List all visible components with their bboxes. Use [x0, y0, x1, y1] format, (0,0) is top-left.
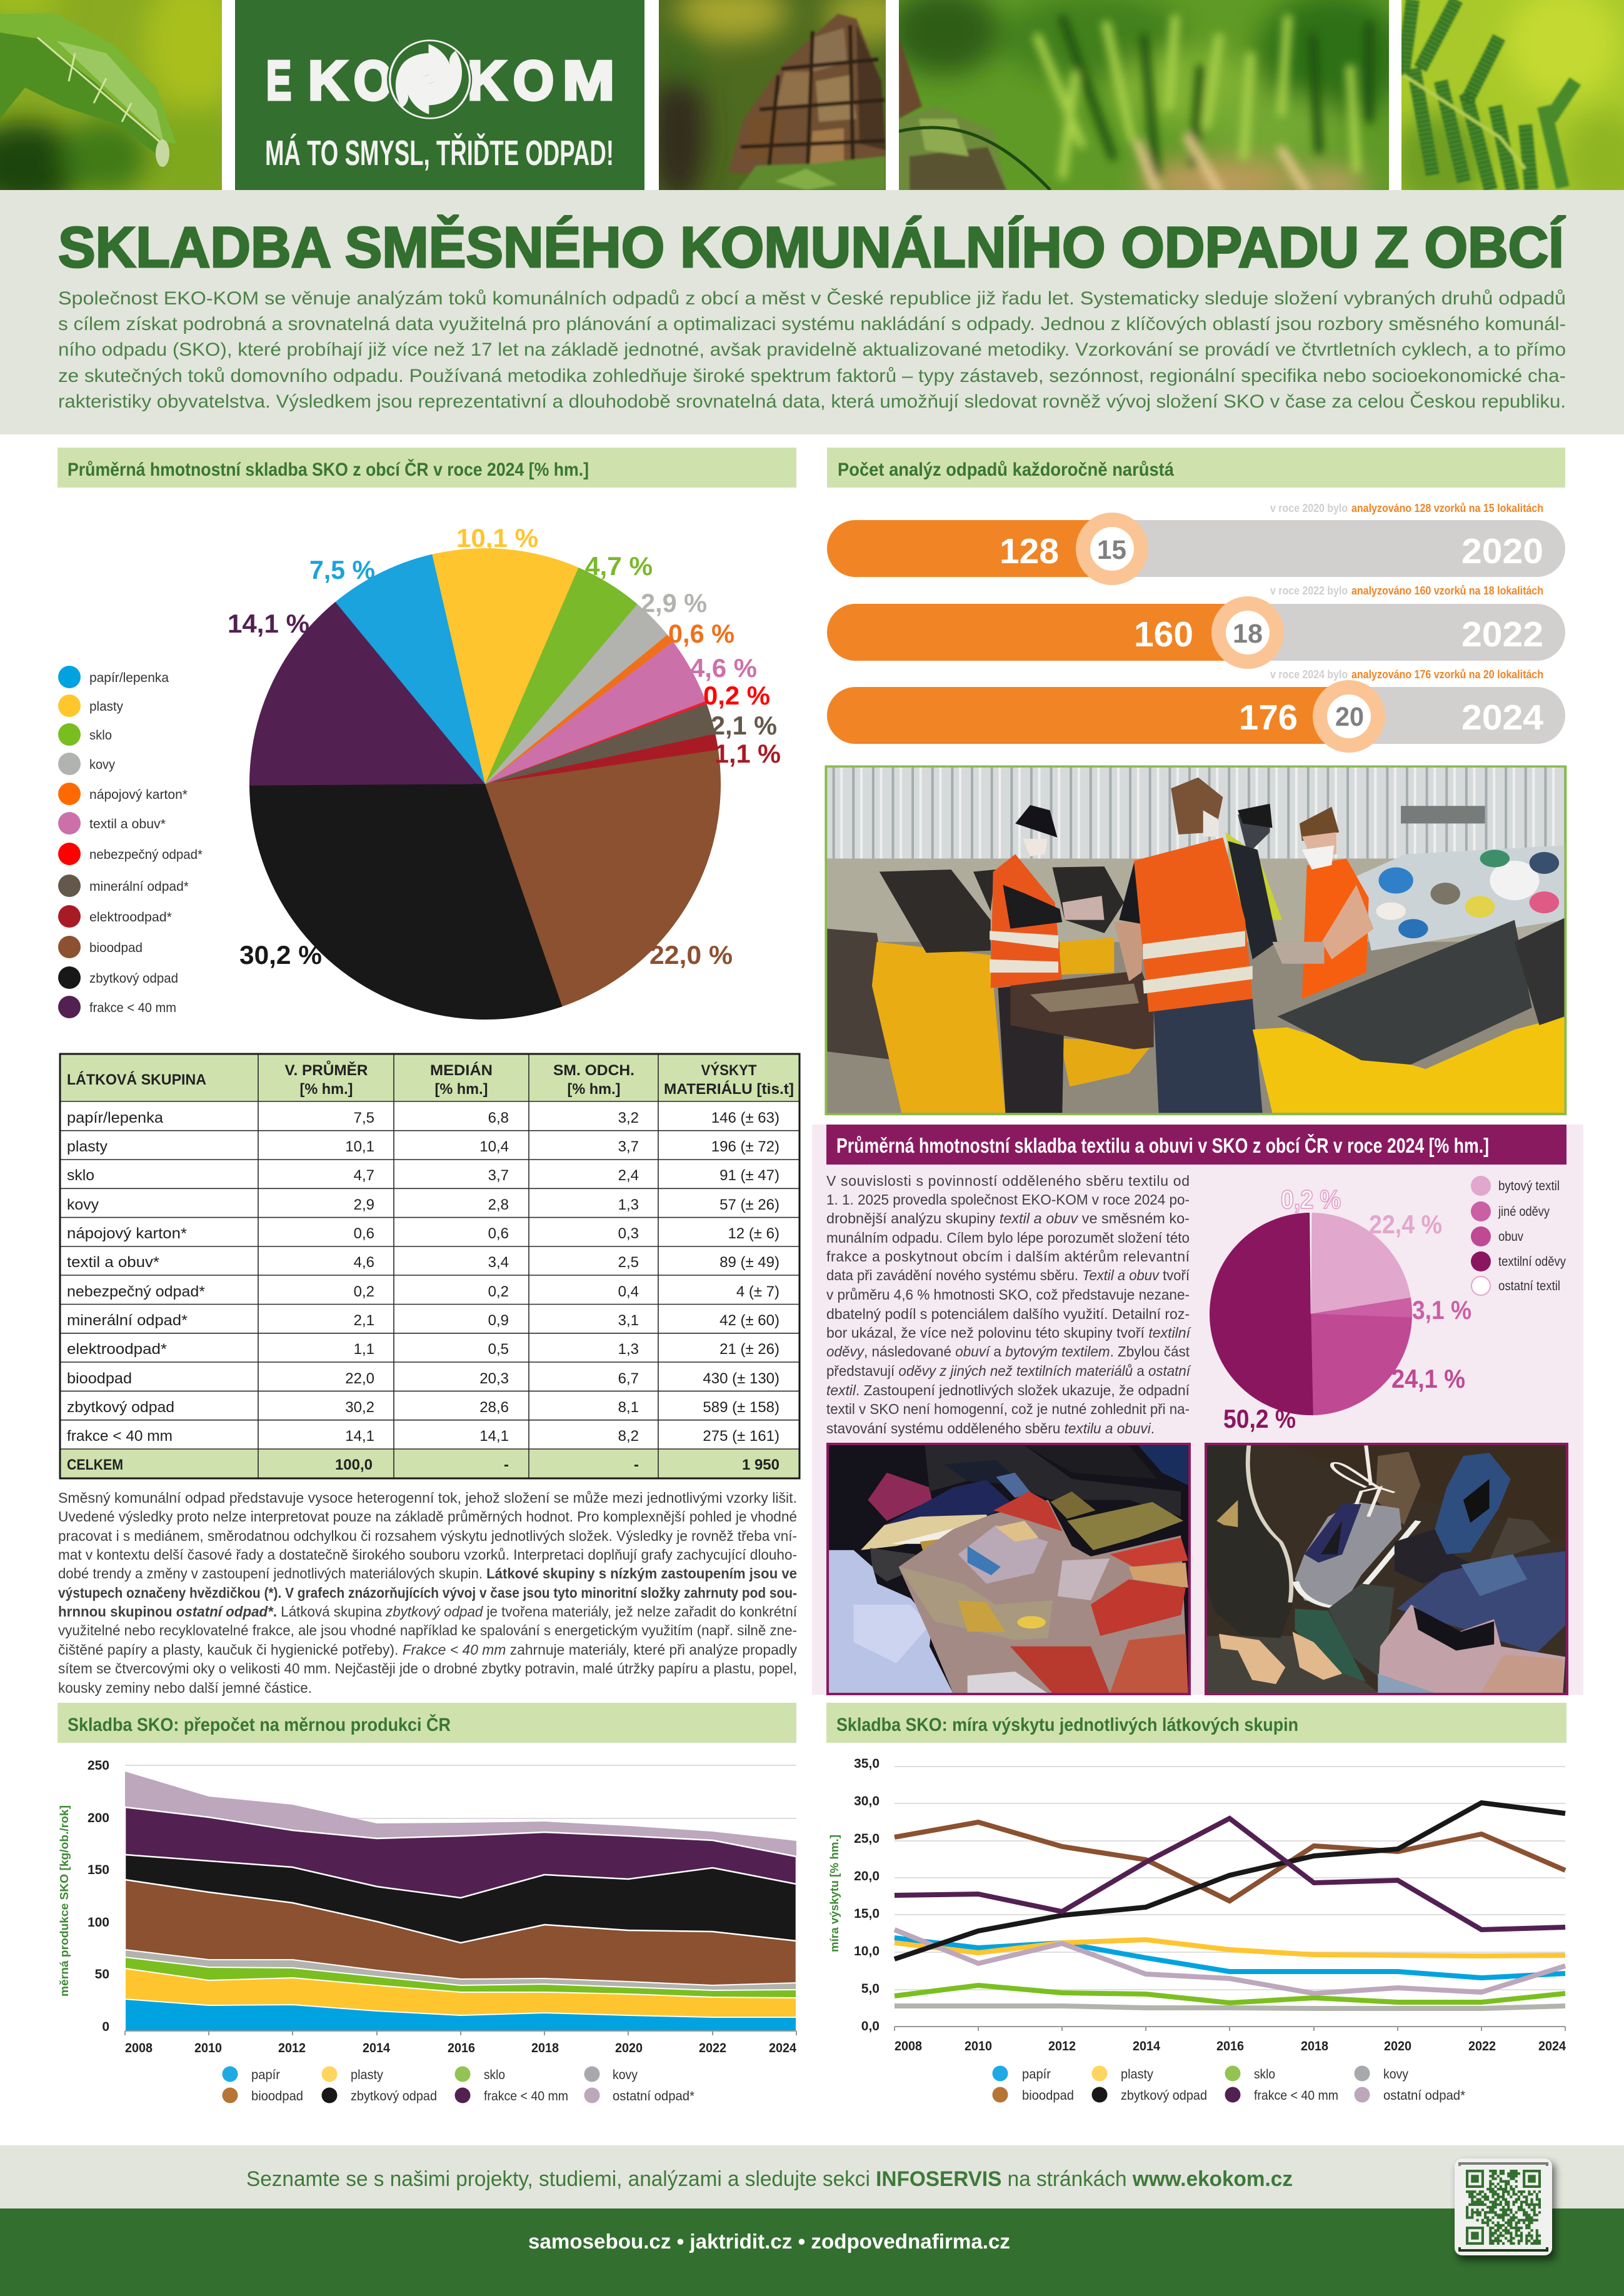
footer band: info: Seznamte se s našimi projekty, studiemi, analýzami a sledujte sekci INFOSERVIS na stránkách www.ekokom.cz: [246, 2167, 1293, 2191]
footer band: websites: [0, 2208, 1624, 2296]
table total row: -: [504, 1456, 509, 1473]
area: plasty: [125, 1968, 796, 2031]
legend: main pie: papír/lepenka: [89, 671, 169, 685]
text block: explanation: [58, 1490, 798, 1696]
text block: explanation: sítem se čtvercovými oky o velikosti 40 mm. Nejčastěji jde o drobné zbytky potravin, malé útržky papíru a plastu, popel,: [58, 1660, 797, 1677]
textile text: frakce a poskytnout obcím i dalším aktérům relevantní: [826, 1248, 1190, 1265]
text block: explanation: pracovat i s mediánem, směrodatnou odchylkou či rozsahem výskytu jednotlivých složek. Výsledky je rovněž třeba vní-: [58, 1528, 797, 1544]
area: bioodpad: [125, 1880, 796, 2031]
table rows: bioodpad: [67, 1370, 132, 1387]
x axis labels: 2022: [699, 2041, 726, 2055]
logo panel: EKO-KOM: [235, 0, 644, 190]
table rows: 7,5: [354, 1110, 374, 1126]
table rows: sklo: [67, 1167, 94, 1184]
table rows: [67, 1110, 779, 1445]
textile text: munálním odpadu. Cílem bylo lépe porozumět složení této: [826, 1230, 1190, 1246]
bar 2020: 128 samples, 15 localities: [827, 502, 1565, 585]
x axis labels: 2020: [615, 2041, 643, 2055]
y axis labels: 35,0: [854, 1757, 880, 1771]
legend: area chart: plasty: [351, 2068, 383, 2082]
text block: explanation: využitelné nebo recyklovatelné frakce, ale jsou vhodné například ke spalování s energetickým využitím (např. silně zne-: [58, 1622, 797, 1638]
y axis labels: 0: [102, 2020, 109, 2034]
pie chart: textile composition: 24,1 %: [1391, 1364, 1465, 1393]
textile text: bor ukázal, že více než polovinu této skupiny tvoří textilní: [826, 1325, 1192, 1341]
table rows: 4,7: [354, 1167, 374, 1184]
legend: textile pie: jiné oděvy: [1498, 1205, 1550, 1219]
bar 2024: 176 samples, 20 localities: v roce 2024 bylo: [1270, 668, 1348, 681]
table header: [% hm.]: [568, 1081, 620, 1098]
textile text: v průměru 4,6 % hmotnosti SKO, což představuje nezane-: [826, 1286, 1190, 1303]
title: SKLADBA SMĚSNÉHO KOMUNÁLNÍHO ODPADU Z OBCÍ: [58, 214, 1565, 279]
x axis labels: 2008: [895, 2039, 922, 2053]
x axis labels: 2008: [125, 2041, 153, 2055]
photo: discarded textiles: [825, 1437, 1195, 1701]
pie value labels: [228, 523, 781, 970]
logo wordmark left: K: [308, 49, 348, 111]
legend: main pie: textil a obuv*: [89, 817, 166, 831]
table header: VÝSKYT: [701, 1061, 757, 1079]
x axis labels: [125, 2041, 796, 2055]
table rows: 3,7: [618, 1138, 639, 1155]
section heading: specific production: Skladba SKO: přepočet na měrnou produkci ČR: [68, 1714, 451, 1735]
photo: fern: [1401, 0, 1624, 190]
intro text: Společnost EKO-KOM se věnuje analýzám toků komunálních odpadů z obcí a měst v České republice již řadu let. Systematicky sleduje složení vybraných druhů odpadů: [58, 288, 1566, 309]
x axis labels: 2014: [363, 2041, 390, 2055]
intro text: ního odpadu (SKO), které probíhají již více než 17 let na základě jednotné, avšak pravidelně aktualizované metodiky. Vzorkování se provádí ve čtvrtletních cyklech, a to přímo: [58, 339, 1566, 360]
table rows: 3,1: [618, 1312, 639, 1329]
logo tagline: MÁ TO SMYSL, TŘIĎTE ODPAD!: [265, 133, 614, 173]
legend: main pie: minerální odpad*: [89, 880, 189, 894]
logo wordmark left: E: [266, 49, 291, 111]
logo wordmark right: O: [513, 49, 554, 111]
photo frames: textile photos: [828, 1444, 1567, 1694]
y axis labels: 0,0: [861, 2019, 880, 2033]
table rows: nápojový karton*: [67, 1225, 187, 1242]
table rows: 6,8: [488, 1110, 509, 1126]
line: kovy: [895, 2006, 1565, 2008]
table rows: kovy: [67, 1196, 99, 1213]
x axis labels: 2022: [1468, 2039, 1496, 2053]
table rows: 8,1: [618, 1399, 639, 1416]
y axis labels: 30,0: [854, 1794, 880, 1808]
table total row: 100,0: [335, 1456, 373, 1473]
x axis labels: 2014: [1133, 2039, 1160, 2053]
intro text: ze skutečných toků domovního odpadu. Používaná metodika zohledňuje široké spektrum faktorů – typy zástaveb, sezónnost, regionální specifika nebo socioekonomické cha-: [58, 366, 1566, 386]
section heading: number of analyses: [827, 448, 1565, 488]
table rows: 10,4: [479, 1138, 509, 1155]
section heading: composition pie: [58, 448, 796, 488]
table rows: papír/lepenka: [67, 1110, 164, 1126]
bar 2024: 176 samples, 20 localities: [827, 668, 1565, 753]
area: frakce: [125, 1807, 796, 2031]
line: plasty: [895, 1940, 1565, 1956]
bar 2020: 128 samples, 15 localities: 2020: [1461, 531, 1543, 571]
legend: main pie: sklo: [89, 728, 112, 743]
legend: main pie: nebezpečný odpad*: [89, 848, 203, 862]
table rows: 14,1: [479, 1428, 509, 1445]
bar 2022: 160 samples, 18 localities: analyzováno 160 vzorků na 18 lokalitách: [1351, 584, 1543, 597]
section heading: number of analyses: Počet analýz odpadů každoročně narůstá: [838, 459, 1174, 480]
table rows: 3,2: [618, 1110, 639, 1126]
table header: MEDIÁN: [430, 1061, 493, 1079]
text block: explanation: mat v kontextu delší časové řady a dostatečně širokého souboru vzorků. Interpretaci doplňují grafy zachycující dlouho-: [58, 1547, 797, 1563]
x axis labels: 2010: [194, 2041, 222, 2055]
area: kovy: [125, 1950, 796, 2031]
textile text: drobnější analýzu skupiny textil a obuv ve směsném ko-: [826, 1210, 1190, 1226]
bar 2020: 128 samples, 15 localities: 15: [1097, 535, 1126, 565]
table rows: 91 (± 47): [719, 1167, 779, 1184]
y axis labels: 5,0: [861, 1982, 880, 1996]
line chart: occurrence rate: [828, 1757, 1566, 2103]
legend: area chart: papír: [251, 2068, 280, 2082]
text block: explanation: čištěné papíry a plasty, kaučuk či hygienické potřeby). Frakce < 40 mm zahrnuje materiály, které při analýze propadly: [58, 1642, 797, 1658]
table rows: 20,3: [479, 1370, 509, 1387]
table rows: 430 (± 130): [703, 1370, 779, 1387]
table rows: 196 (± 72): [711, 1138, 779, 1155]
legend: line chart: papír: [1022, 2067, 1051, 2082]
table header: [% hm.]: [300, 1081, 353, 1098]
QR code: [1455, 2158, 1555, 2260]
panel heading: [826, 1125, 1566, 1165]
x axis labels: 2012: [1048, 2039, 1076, 2053]
area: papír: [125, 1999, 796, 2031]
pie value labels: 0,2 %: [703, 681, 770, 710]
intro text: rakteristiky obyvatelstva. Výsledkem jsou reprezentativní a dlouhodobě srovnatelná data, která umožňují sledovat rovněž vývoj složení SKO v čase za celou Českou republiku.: [58, 391, 1566, 412]
table header: V. PRŮMĚR: [285, 1060, 368, 1079]
logo wordmark right: [468, 49, 614, 111]
logo wordmark right: M: [563, 49, 614, 111]
legend: area chart: frakce < 40 mm: [484, 2089, 568, 2103]
legend: line chart: sklo: [1254, 2067, 1275, 2082]
pie value labels: 1,1 %: [714, 739, 781, 768]
table rows: 0,2: [354, 1283, 374, 1300]
y axis labels: 250: [88, 1758, 109, 1773]
table rows: 6,7: [618, 1370, 639, 1387]
table header: [67, 1060, 794, 1098]
footer band: websites: samosebou.cz • jaktridit.cz • zodpovednafirma.cz: [528, 2230, 1010, 2253]
x axis labels: [895, 2039, 1566, 2053]
legend: line chart: zbytkový odpad: [1121, 2088, 1207, 2103]
legend: line chart: plasty: [1121, 2067, 1153, 2082]
legend: main pie: zbytkový odpad: [89, 971, 178, 986]
section heading: occurrence rate: [826, 1703, 1566, 1743]
textile text: data při zavádění nového systému sběru. Textil a obuv tvoří: [826, 1267, 1190, 1283]
pie chart: textile composition: 0,2 %: [1281, 1185, 1341, 1214]
table rows: 21 (± 26): [719, 1341, 779, 1358]
table rows: 4,6: [354, 1254, 374, 1271]
text block: explanation: kousky zeminy nebo další jemné částice.: [58, 1680, 312, 1696]
table rows: 3,7: [488, 1167, 509, 1184]
legend: area chart: ostatní odpad*: [613, 2089, 694, 2103]
table rows: frakce < 40 mm: [67, 1428, 173, 1445]
y axis labels: 100: [88, 1915, 109, 1930]
section heading: specific production: [58, 1703, 796, 1743]
intro text: s cílem získat podrobná a srovnatelná data využitelná pro plánování a optimalizaci systému nakládání s odpady. Jednou z klíčových oblastí jsou rozbory směsného komunál-: [58, 314, 1566, 334]
legend: textile pie: bytový textil: [1498, 1179, 1560, 1193]
legend: main pie: bioodpad: [89, 941, 143, 955]
table rows: 146 (± 63): [711, 1110, 779, 1126]
legend: textile pie: textilní oděvy: [1498, 1255, 1566, 1269]
pie chart: textile composition: 22,4 %: [1369, 1210, 1442, 1239]
table rows: 89 (± 49): [719, 1254, 779, 1271]
pie chart: composition of SKO 2024: [228, 523, 781, 970]
legend: textile pie: [1471, 1176, 1566, 1295]
bar 2022: 160 samples, 18 localities: 2022: [1461, 614, 1543, 654]
table total row: CELKEM: [67, 1456, 123, 1473]
x axis labels: 2024: [1538, 2039, 1566, 2053]
textile text: V souvislosti s povinností odděleného sběru textilu od: [826, 1173, 1190, 1189]
photo: moss and grass: [899, 0, 1389, 190]
x axis labels: 2024: [769, 2041, 796, 2055]
pie value labels: 0,6 %: [668, 619, 734, 648]
table rows: 0,4: [618, 1283, 639, 1300]
table rows: 0,5: [488, 1341, 509, 1358]
table header: MATERIÁLU [tis.t]: [664, 1080, 794, 1098]
icon: recycling arrows in circle: [387, 39, 472, 120]
x axis labels: 2016: [1216, 2039, 1244, 2053]
x axis labels: 2010: [965, 2039, 992, 2053]
table rows: 275 (± 161): [703, 1428, 779, 1445]
pie chart: textile composition: 50,2 %: [1223, 1404, 1296, 1433]
table total row: [67, 1456, 779, 1473]
textile text: textil. Zastoupení jednotlivých složek ukazuje, že odpadní: [826, 1382, 1190, 1398]
legend: area chart: bioodpad: [251, 2089, 303, 2103]
table rows: 2,8: [488, 1196, 509, 1213]
table rows: 30,2: [345, 1399, 374, 1416]
area: sklo: [125, 1957, 796, 2031]
area chart: specific production: [58, 1758, 796, 2103]
legend: line chart: kovy: [1383, 2067, 1408, 2082]
legend: area chart: [223, 2067, 694, 2103]
pie value labels: 22,0 %: [649, 940, 733, 970]
y axis title: měrná produkce SKO [kg/ob./rok]: [58, 1805, 71, 1997]
table rows: 42 (± 60): [719, 1312, 779, 1329]
table rows: 1,3: [618, 1341, 639, 1358]
logo wordmark left: [266, 49, 393, 111]
textile text: 1. 1. 2025 provedla společnost EKO-KOM v roce 2024 po-: [826, 1191, 1190, 1208]
table rows: 1,3: [618, 1196, 639, 1213]
pie value labels: 10,1 %: [456, 523, 538, 553]
table rows: 2,5: [618, 1254, 639, 1271]
x axis labels: 2018: [531, 2041, 559, 2055]
y axis labels: 150: [88, 1863, 109, 1877]
text block: explanation: Uvedené výsledky proto nelze interpretovat pouze na základě průměrných hodnot. Pro komplexnější pohled je vhodné: [58, 1508, 797, 1525]
table header: LÁTKOVÁ SKUPINA: [67, 1071, 206, 1088]
table rows: 2,9: [354, 1196, 374, 1213]
table rows: 589 (± 158): [703, 1399, 779, 1416]
bar 2022: 160 samples, 18 localities: [827, 584, 1565, 669]
pie value labels: 4,7 %: [585, 551, 653, 581]
table rows: plasty: [67, 1138, 108, 1155]
table rows: 0,2: [488, 1283, 509, 1300]
text block: explanation: hrnnou skupinou ostatní odpad*. Látková skupina zbytkový odpad je tvořena materiály, jež nelze zařadit do konkrétní: [58, 1603, 798, 1620]
textile text: stavování systému odděleného sběru textilu a obuvi.: [826, 1420, 1155, 1436]
intro text: [58, 288, 1566, 412]
footer band: info: [0, 2145, 1624, 2208]
photo: green leaf with water drop: [0, 0, 222, 190]
table header: SM. ODCH.: [553, 1062, 634, 1079]
table rows: 22,0: [345, 1370, 374, 1387]
bar 2024: 176 samples, 20 localities: 176: [1239, 698, 1298, 738]
y axis labels: 20,0: [854, 1869, 880, 1883]
x axis labels: 2020: [1384, 2039, 1411, 2053]
textile text: [826, 1173, 1192, 1436]
bar 2020: 128 samples, 15 localities: 128: [1000, 531, 1059, 571]
y axis labels: 25,0: [854, 1832, 880, 1846]
legend: main pie: [58, 666, 203, 1018]
area: zbytkový odpad: [125, 1855, 796, 2031]
table rows: 57 (± 26): [719, 1196, 779, 1213]
table rows: elektroodpad*: [67, 1341, 167, 1358]
y axis labels: [88, 1758, 109, 2034]
legend: main pie: frakce < 40 mm: [89, 1001, 176, 1015]
legend: main pie: plasty: [89, 699, 123, 714]
table rows: nebezpečný odpad*: [67, 1283, 205, 1300]
y axis labels: 15,0: [854, 1907, 880, 1921]
table rows: 28,6: [479, 1399, 509, 1416]
line: sklo: [895, 1985, 1565, 2003]
pie value labels: 2,1 %: [711, 711, 777, 740]
y axis labels: [854, 1757, 880, 2033]
x axis labels: 2018: [1301, 2039, 1328, 2053]
bar 2022: 160 samples, 18 localities: v roce 2022 bylo: [1270, 584, 1348, 597]
bar 2024: 176 samples, 20 localities: analyzováno 176 vzorků na 20 lokalitách: [1351, 668, 1543, 681]
table total row: 1 950: [742, 1456, 779, 1473]
legend: line chart: [993, 2065, 1465, 2103]
line: ostatní odpad: [895, 1930, 1565, 1993]
intro band: [0, 190, 1624, 434]
legend: main pie: nápojový karton*: [89, 788, 188, 802]
line: papír: [895, 1938, 1565, 1978]
bar 2022: 160 samples, 18 localities: 160: [1134, 614, 1193, 654]
photo: waste analysis workers: [826, 766, 1565, 1114]
bar 2024: 176 samples, 20 localities: 20: [1335, 702, 1364, 732]
legend: textile pie: obuv: [1498, 1230, 1523, 1244]
table total row: -: [634, 1456, 639, 1473]
legend: area chart: kovy: [613, 2068, 638, 2082]
y axis title: míra výskytu [% hm.]: [828, 1835, 841, 1952]
legend: textile pie: ostatní textil: [1498, 1279, 1560, 1293]
legend: main pie: elektroodpad*: [89, 910, 172, 925]
table rows: 0,3: [618, 1225, 639, 1242]
y axis labels: 10,0: [854, 1944, 880, 1958]
section heading: composition pie: Průměrná hmotnostní skladba SKO z obcí ČR v roce 2024 [% hm.]: [68, 459, 589, 480]
bar 2020: 128 samples, 15 localities: analyzováno 128 vzorků na 15 lokalitách: [1351, 502, 1543, 514]
photo: discarded shoes: [1205, 1437, 1575, 1701]
legend: line chart: frakce < 40 mm: [1254, 2088, 1338, 2103]
table rows: 4 (± 7): [736, 1283, 779, 1300]
table: material groups: [60, 1054, 799, 1478]
table rows: 2,4: [618, 1167, 639, 1184]
text block: explanation: výstupech označeny hvězdičkou (*). V grafech znázorňujících vývoj v čase jsou tyto minoritní složky zahrnuty pod sou-: [58, 1585, 797, 1601]
legend: main pie: kovy: [89, 758, 115, 772]
table rows: 8,2: [618, 1428, 639, 1445]
table rows: 3,4: [488, 1254, 509, 1271]
table rows: 0,6: [488, 1225, 509, 1242]
table rows: zbytkový odpad: [67, 1399, 174, 1416]
area: ostatní odpad: [125, 1772, 796, 2031]
x axis labels: 2012: [278, 2041, 306, 2055]
bar 2020: 128 samples, 15 localities: v roce 2020 bylo: [1270, 502, 1348, 514]
y axis labels: 50: [95, 1967, 109, 1982]
line: zbytkový odpad: [895, 1803, 1565, 1959]
text block: explanation: dobé trendy a změny v zastoupení jednotlivých materiálových skupin. Látkové skupiny s nízkým zastoupením jsou ve: [58, 1565, 797, 1582]
pie value labels: 14,1 %: [228, 609, 309, 638]
logo wordmark left: O: [354, 49, 393, 111]
table rows: textil a obuv*: [67, 1254, 159, 1271]
bar 2022: 160 samples, 18 localities: 18: [1233, 619, 1263, 649]
table rows: minerální odpad*: [67, 1312, 188, 1329]
pie value labels: 7,5 %: [309, 555, 375, 584]
pie value labels: 4,6 %: [690, 653, 757, 683]
panel: textile and footwear: [812, 1125, 1583, 1695]
panel: textile and footwear: Průměrná hmotnostní skladba textilu a obuvi v SKO z obcí ČR v roce 2024 [% hm.]: [836, 1133, 1489, 1157]
table rows: 0,9: [488, 1312, 509, 1329]
y axis labels: 200: [88, 1811, 109, 1825]
table rows: 12 (± 6): [728, 1225, 779, 1242]
pie value labels: 30,2 %: [239, 940, 322, 970]
textile text: textil v SKO není homogenní, což je nutné zohlednit při na-: [826, 1401, 1190, 1417]
logo wordmark right: K: [468, 49, 506, 111]
table rows: 0,6: [354, 1225, 374, 1242]
pie value labels: 2,9 %: [641, 588, 707, 618]
x axis labels: 2016: [448, 2041, 475, 2055]
legend: line chart: bioodpad: [1022, 2088, 1074, 2103]
table header: [% hm.]: [435, 1081, 488, 1098]
table rows: 2,1: [354, 1312, 374, 1329]
bar 2024: 176 samples, 20 localities: 2024: [1461, 698, 1543, 738]
legend: area chart: sklo: [484, 2068, 505, 2082]
line: bioodpad: [895, 1822, 1565, 1901]
legend: area chart: zbytkový odpad: [351, 2089, 437, 2103]
table rows: 14,1: [345, 1428, 374, 1445]
textile text: představují oděvy z jiných než textilních materiálů a ostatní: [826, 1363, 1192, 1379]
textile text: dbatelný podíl s potenciálem dalšího využití. Detailní roz-: [826, 1306, 1190, 1322]
photo: pine cone: [659, 0, 886, 190]
section heading: occurrence rate: Skladba SKO: míra výskytu jednotlivých látkových skupin: [836, 1715, 1298, 1735]
table rows: 10,1: [345, 1138, 374, 1155]
legend: line chart: ostatní odpad*: [1383, 2088, 1465, 2103]
pie chart: textile composition: 3,1 %: [1412, 1295, 1471, 1325]
pie chart: textile composition: [1223, 1185, 1471, 1433]
line: frakce: [895, 1818, 1565, 1930]
text block: explanation: Směsný komunální odpad představuje vysoce heterogenní tok, jehož složení se může mezi jednotlivými vzorky lišit.: [58, 1490, 797, 1506]
textile text: oděvy, následované obuví a bytovým textilem. Zbylou část: [826, 1343, 1190, 1360]
table rows: 1,1: [354, 1341, 374, 1358]
